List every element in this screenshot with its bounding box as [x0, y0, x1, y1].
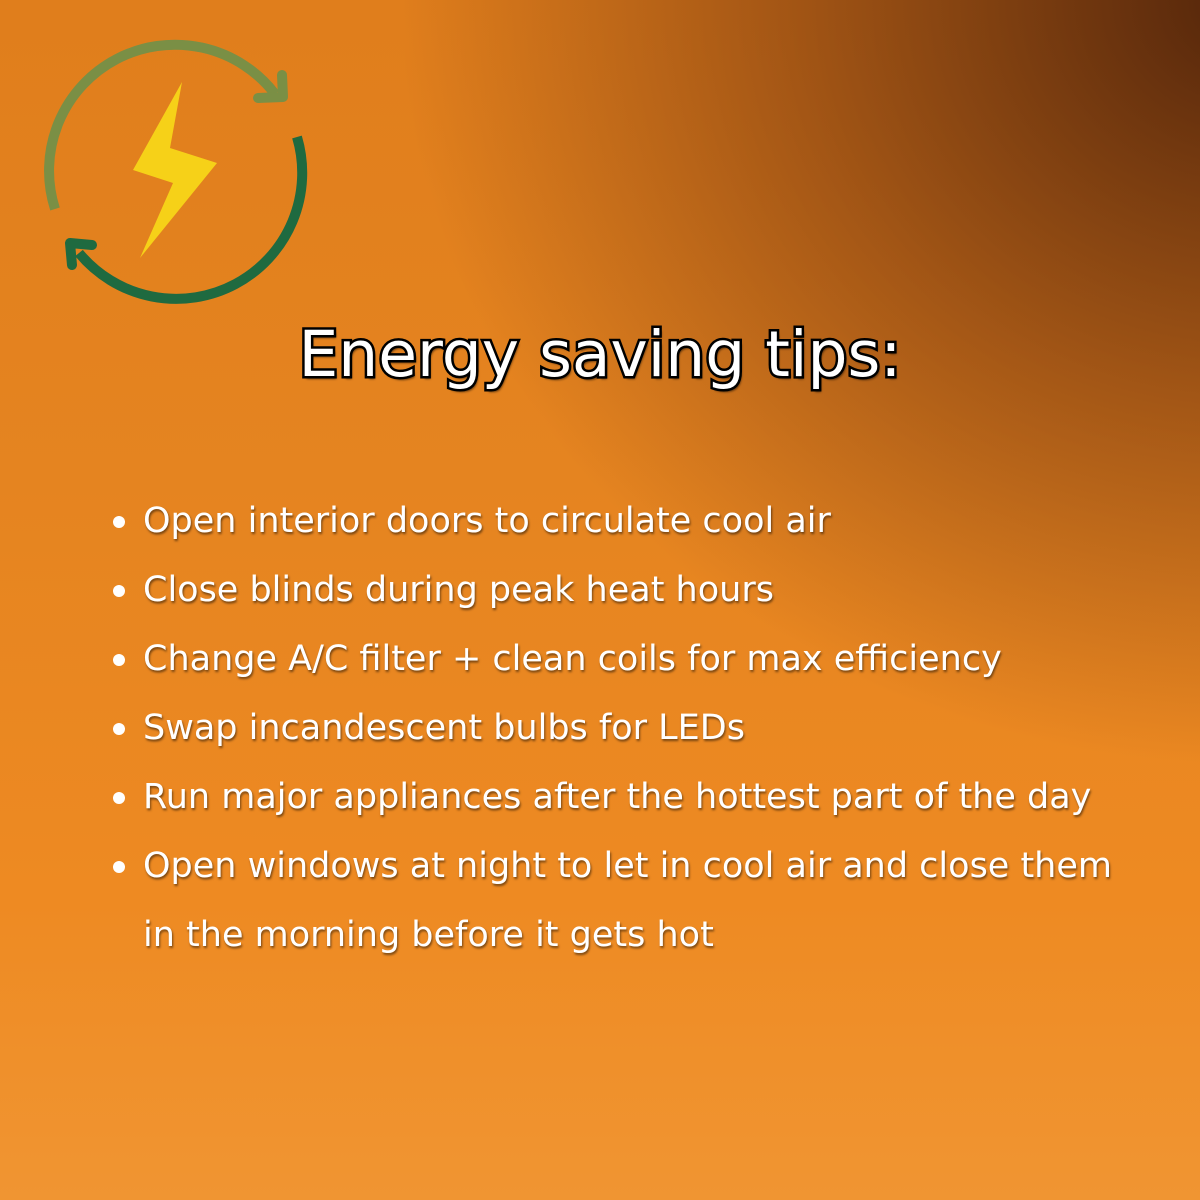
tips list	[113, 501, 1112, 956]
icon: energy recycle bolt	[44, 40, 308, 304]
tips list: Open interior doors to circulate cool air	[143, 501, 831, 541]
tips list: Run major appliances after the hottest part of the day	[143, 777, 1091, 817]
tips list: Swap incandescent bulbs for LEDs	[143, 708, 745, 748]
tips list: Open windows at night to let in cool air and close them	[143, 846, 1112, 886]
tips list: Close blinds during peak heat hours	[143, 570, 774, 610]
tips list: in the morning before it gets hot	[143, 915, 714, 955]
title: Energy saving tips:	[298, 318, 902, 391]
tips list: Change A/C filter + clean coils for max efficiency	[143, 639, 1002, 679]
